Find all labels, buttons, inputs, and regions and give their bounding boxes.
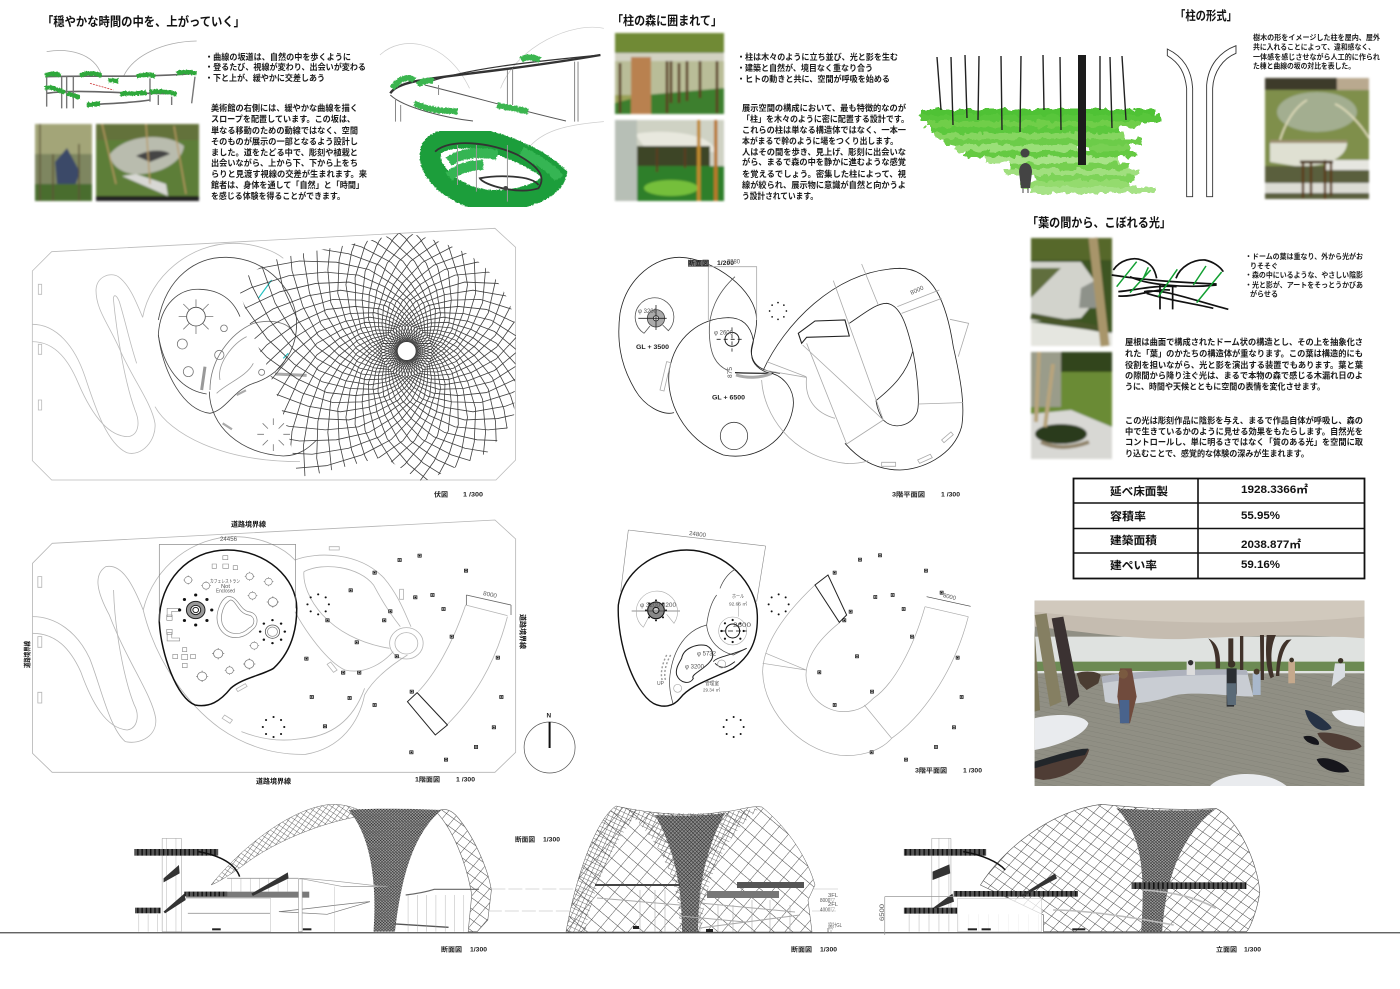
label: roof plan scale bbox=[434, 490, 483, 498]
bullet list: column forest: ・建築と自然が、境目なく重なり合う bbox=[737, 62, 873, 73]
labels: third floor plan top: 8000 bbox=[910, 285, 926, 297]
text block: filtered light description: 中で生きているかのように見せる効果をもたらします。自然光を bbox=[1125, 426, 1363, 436]
text block: filtered light description: この光は彫刻作品に陰影を与え、まるで作品自体が呼吸し、森の bbox=[1125, 414, 1363, 426]
text block: slope description: 単なる移動のための動線ではなく、空間 bbox=[211, 124, 358, 136]
heading: filtered light: 「葉の間から、こぼれる光」 bbox=[1027, 215, 1171, 230]
label: upper section scale: 1/300 bbox=[543, 836, 560, 844]
label: roof plan scale: 伏図 bbox=[434, 490, 448, 498]
text block: column form bbox=[1253, 33, 1381, 70]
labels: third floor plan bottom: 92.66 ㎡ bbox=[729, 600, 748, 606]
lattice roof bbox=[240, 233, 516, 480]
labels: first floor plan: 24456 bbox=[220, 537, 238, 543]
photo: column form model bbox=[1265, 78, 1369, 199]
text block: column forest description: これらの柱は単なる構造体ではなく、一本一 bbox=[742, 124, 906, 135]
labels: third floor plan top bbox=[636, 258, 960, 498]
text block: slope description: らりと見渡す視線の交差が生まれます。来 bbox=[211, 168, 367, 179]
bullet list: filtered light: りそそぐ bbox=[1250, 262, 1278, 270]
site outline and serpentine path bbox=[32, 228, 516, 480]
building section bbox=[134, 838, 584, 932]
labels: first floor plan bbox=[22, 520, 528, 786]
text block: column form: 一体感を感じさせながら人工的に作られ bbox=[1253, 52, 1380, 62]
bullet list: filtered light bbox=[1245, 252, 1364, 298]
first floor plan bbox=[22, 520, 528, 786]
labels: third floor plan bottom: 管理室 bbox=[705, 680, 719, 687]
label: upper section scale: 断面図 bbox=[515, 834, 535, 844]
text block: filtered light description: の隙間から降り注ぐ光は、まるで本物の森で感じる木漏れ日のよ bbox=[1125, 370, 1363, 380]
photo: slope trees bbox=[35, 124, 92, 201]
area table: 建築面積 bbox=[1110, 533, 1157, 547]
text block: column form: 樹木の形をイメージした柱を屋内、屋外 bbox=[1253, 33, 1381, 42]
labels: section 2 levels: 0▽ bbox=[827, 928, 833, 934]
text block: slope description: ました。道をたどる中で、彫刻や植栽と bbox=[211, 146, 358, 158]
labels: elevation: 1/300 bbox=[1244, 946, 1261, 954]
text block: column forest description: 線が絞られ、展示物に意識が自然と向かうよ bbox=[742, 179, 906, 190]
bullet list: slope bbox=[205, 51, 366, 83]
bullet list: column forest bbox=[737, 51, 898, 84]
photo: leaf roof bottom bbox=[1031, 352, 1112, 459]
lattice dome bbox=[211, 804, 491, 932]
text block: filtered light description: うに、時間や天候とともに空間の表情を変化させます。 bbox=[1125, 380, 1325, 392]
text block: filtered light description: 屋根は曲面で構成されたドーム状の構造とし、その上を抽象化さ bbox=[1125, 336, 1363, 347]
labels: section 2 levels: 8000▽ bbox=[820, 898, 835, 904]
area table: 2038.877㎡ bbox=[1241, 538, 1301, 551]
text block: filtered light description: コントロールし、単に明るさではなく「質のある光」を空間に取 bbox=[1125, 436, 1363, 447]
bullet list: column forest: ・ヒトの動きと共に、空間が呼吸を始める bbox=[737, 73, 890, 84]
labels: section 2 levels: 2FL bbox=[828, 902, 838, 908]
labels: third floor plan top: 875 bbox=[728, 366, 734, 378]
text block: slope description: そのものが展示の一部となるよう設計し bbox=[211, 136, 358, 146]
text block: filtered light description: 役割を担いながら、光と影を演出する装置でもあります。葉と葉 bbox=[1125, 359, 1363, 370]
volumes bbox=[618, 530, 971, 756]
labels: first floor plan: 道路境界線 bbox=[256, 776, 291, 786]
section 2 bbox=[566, 806, 842, 954]
third floor plan, top bbox=[619, 257, 969, 498]
labels: third floor plan top: 断面図 bbox=[688, 258, 709, 267]
labels: elevation: 6500 bbox=[880, 903, 886, 921]
sketch: slope elevation bbox=[45, 41, 197, 108]
labels: first floor plan: Not bbox=[221, 584, 231, 590]
sketch: green ramp perspective bbox=[380, 27, 604, 202]
site plan with lattice roof bbox=[32, 228, 516, 498]
labels: section 2 levels: 設計GL bbox=[828, 922, 842, 929]
photo: column forest bottom bbox=[615, 120, 724, 201]
floor outlines bbox=[619, 257, 969, 470]
bullet list: slope: ・下と上が、緩やかに交差しあう bbox=[205, 72, 325, 83]
labels: third floor plan bottom: 1 /300 bbox=[963, 768, 982, 774]
labels: first floor plan: 道路境界線 bbox=[22, 641, 32, 668]
area table: 59.16% bbox=[1241, 559, 1280, 571]
heading: column forest: 「柱の森に囲まれて」 bbox=[612, 13, 722, 28]
columns and dot rings bbox=[178, 554, 503, 761]
text block: column forest description bbox=[742, 102, 909, 201]
bullet list: column forest: ・柱は木々のように立ち並び、光と影を生む bbox=[737, 51, 898, 62]
text block: slope description: 出会いながら、上から下、下から上をち bbox=[211, 157, 358, 168]
label: section 1 scale: 断面図 bbox=[441, 944, 462, 954]
labels: section 2 levels: 断面図 bbox=[791, 944, 812, 954]
bullet list: slope: ・曲線の坂道は、自然の中を歩くように bbox=[205, 51, 351, 62]
labels: first floor plan: 道路境界線 bbox=[518, 614, 528, 649]
labels: third floor plan bottom: φ 3200 bbox=[685, 664, 705, 670]
text block: column forest description: 展示空間の構成において、最も特徴的なのが bbox=[742, 102, 906, 113]
text block: slope description: 美術館の右側には、緩やかな曲線を描く bbox=[211, 102, 358, 113]
text block: slope description: を感じる体験を得ることができます。 bbox=[211, 190, 345, 201]
area table bbox=[1073, 478, 1364, 578]
text block: column forest description: 本がまるで幹のように場をつくり出します。 bbox=[742, 135, 898, 146]
interior perspective render bbox=[1035, 601, 1364, 786]
labels: third floor plan top: φ 3200 bbox=[638, 309, 658, 315]
area table: 1928.3366㎡ bbox=[1241, 483, 1308, 496]
section 1 bbox=[134, 804, 584, 954]
cafe volume bbox=[159, 544, 297, 706]
building section bbox=[595, 882, 804, 932]
text block: filtered light description: り込むことで、感覚的な体験の深みが生まれます。 bbox=[1125, 448, 1309, 458]
area table: 55.95% bbox=[1241, 510, 1280, 522]
photo: column forest top bbox=[615, 33, 724, 114]
labels: section 2 levels: 1/300 bbox=[820, 946, 837, 954]
area table: 容積率 bbox=[1110, 509, 1146, 523]
labels: third floor plan bottom: φ 3200 3200 bbox=[640, 603, 677, 609]
diagram: light through leaves bbox=[1112, 259, 1228, 309]
text block: slope description: スロープを配置しています。この坂は、 bbox=[211, 113, 355, 124]
labels: third floor plan top: 2880 bbox=[727, 260, 741, 266]
text block: column forest description: う設計されています。 bbox=[742, 190, 818, 201]
text block: slope description bbox=[211, 102, 367, 201]
text block: filtered light description: れた「葉」のかたちの構造体が重なります。この葉は構造的にも bbox=[1125, 348, 1363, 358]
labels: third floor plan top: GL + 6500 bbox=[712, 394, 745, 402]
labels: third floor plan bottom: 2600 bbox=[733, 623, 752, 629]
labels: third floor plan top: 1/200 bbox=[717, 260, 734, 267]
bullet list: filtered light: がらせる bbox=[1250, 290, 1278, 298]
ground line bbox=[0, 932, 1400, 933]
text block: filtered light description bbox=[1125, 336, 1363, 458]
text block: column forest description: 「柱」を木々のように密に配置する設計です。 bbox=[742, 113, 909, 124]
bullet list: filtered light: ・光と影が、アートをそっとうかびあ bbox=[1245, 280, 1363, 290]
bullet list: filtered light: ・森の中にいるような、やさしい陰影 bbox=[1245, 270, 1364, 280]
lattice dome bbox=[566, 806, 815, 932]
labels: first floor plan: 1 /300 bbox=[456, 776, 475, 784]
bullet list: filtered light: ・ドームの葉は重なり、外から光がお bbox=[1245, 252, 1363, 261]
labels: first floor plan: 8000 bbox=[482, 591, 498, 600]
labels: first floor plan: Enclosed bbox=[216, 588, 235, 594]
building footprints under roof bbox=[158, 257, 317, 456]
label: upper section scale bbox=[515, 834, 560, 844]
labels: first floor plan: 道路境界線 bbox=[231, 520, 266, 528]
north compass bbox=[524, 712, 575, 773]
labels: third floor plan bottom: 8000 bbox=[942, 593, 957, 602]
roof oculus bbox=[398, 342, 416, 360]
text block: column form: 共に入れることによって、違和感なく、 bbox=[1253, 42, 1375, 52]
labels: section 2 levels: 4000▽ bbox=[820, 908, 835, 914]
lattice dome bbox=[980, 804, 1260, 932]
labels: section 2 levels: 3FL bbox=[828, 893, 838, 899]
text block: slope description: 館者は、身体を通して「自然」と「時間」 bbox=[211, 179, 364, 190]
heading: column form: 「柱の形式」 bbox=[1175, 8, 1237, 23]
site and paths bbox=[32, 520, 516, 772]
label: section 1 scale: 1/300 bbox=[470, 946, 487, 954]
text block: column form: た棟と曲線の坂の対比を表した。 bbox=[1253, 62, 1355, 70]
north compass: N bbox=[546, 712, 552, 720]
labels: third floor plan bottom: 29.34 ㎡ bbox=[703, 686, 720, 692]
labels: third floor plan bottom: ホール bbox=[732, 594, 744, 600]
area table: 建ぺい率 bbox=[1110, 558, 1157, 572]
labels: third floor plan bottom: 24800 bbox=[689, 531, 707, 539]
labels: section 2 levels bbox=[791, 889, 842, 954]
labels: third floor plan bottom: φ 5732 bbox=[697, 652, 717, 658]
diagram: Y-shaped column bbox=[1167, 46, 1236, 197]
area table: 延べ床面製 bbox=[1110, 484, 1168, 498]
photo: leaf roof top bbox=[1031, 238, 1112, 346]
label: roof plan scale: 1 /300 bbox=[463, 492, 483, 498]
labels: third floor plan bottom bbox=[640, 531, 982, 774]
heading: slope section: 「穏やかな時間の中を、上がっていく」 bbox=[42, 14, 245, 29]
labels: elevation bbox=[880, 903, 1261, 954]
labels: first floor plan: 1階面図 bbox=[415, 776, 440, 784]
text block: column forest description: がら、まるで森の中を静かに進むような感覚 bbox=[742, 156, 906, 167]
text block: column forest description: を覚えるでしょう。密集した柱によって、視 bbox=[742, 168, 906, 179]
labels: third floor plan bottom: UP bbox=[657, 681, 665, 687]
elevation bbox=[880, 804, 1261, 954]
building elevation bbox=[885, 838, 1246, 935]
labels: third floor plan bottom: 3階平面図 bbox=[915, 766, 947, 774]
labels: third floor plan top: φ 2600 bbox=[714, 330, 734, 336]
photo: slope model bbox=[96, 124, 199, 201]
sketch: forest of columns on grass bbox=[920, 55, 1160, 193]
labels: first floor plan: カフェレストラン bbox=[210, 579, 240, 585]
columns bbox=[645, 554, 963, 761]
labels: third floor plan top: 3階平面図 bbox=[892, 490, 925, 498]
labels: third floor plan top: 1 /300 bbox=[941, 492, 960, 498]
third floor plan, bottom bbox=[618, 530, 982, 774]
label: section 1 scale bbox=[441, 944, 487, 954]
labels: third floor plan top: GL + 3500 bbox=[636, 344, 669, 351]
labels: elevation: 立面図 bbox=[1216, 944, 1237, 954]
bullet list: slope: ・登るたび、視線が変わり、出会いが変わる bbox=[205, 61, 366, 72]
text block: column forest description: 人はその間を歩き、見上げ、彫刻に出会いな bbox=[742, 146, 906, 157]
dot ring bbox=[769, 302, 787, 320]
